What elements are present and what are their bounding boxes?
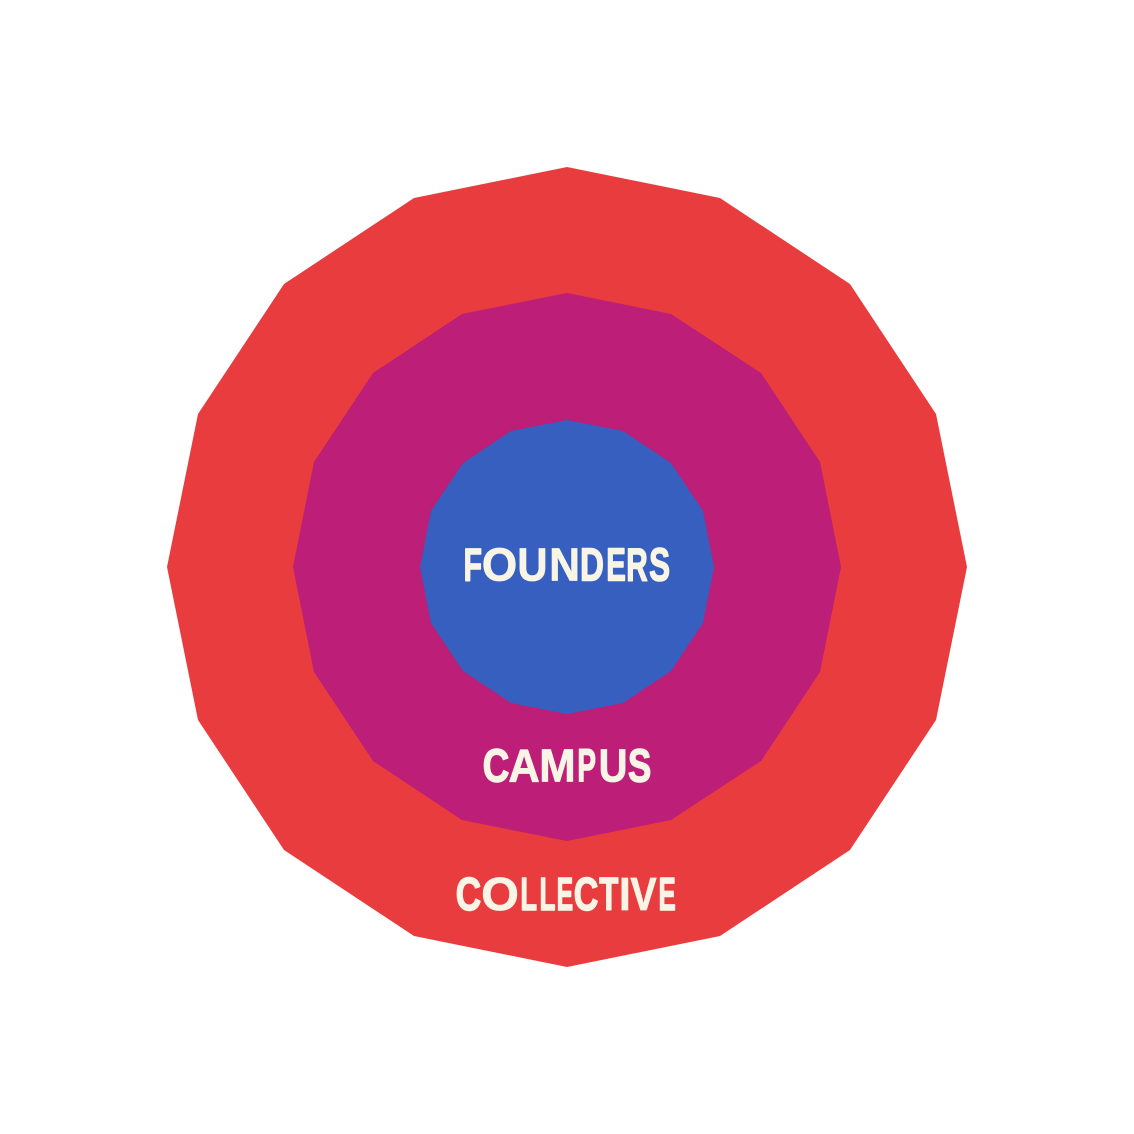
middle ring: campus <box>293 293 841 841</box>
label: campus: S <box>628 740 651 792</box>
label: founders: N <box>549 540 580 591</box>
label: campus: P <box>577 742 596 792</box>
label: founders: R <box>626 540 648 591</box>
label: founders: S <box>649 540 670 591</box>
label: founders: F <box>464 540 482 591</box>
label: collective: V <box>630 869 657 921</box>
inner circle: founders <box>420 420 714 714</box>
label: founders: E <box>606 540 626 591</box>
label: collective: E <box>557 869 573 920</box>
label: collective: O <box>481 868 519 920</box>
label: campus: M <box>539 740 576 792</box>
label: founders: D <box>580 540 604 591</box>
label: founders: U <box>517 540 548 591</box>
label: collective <box>456 868 676 921</box>
label: campus: A <box>508 740 540 792</box>
label: founders <box>464 539 670 591</box>
label: collective: C <box>456 868 481 920</box>
label: collective: L <box>520 870 537 921</box>
label: collective: T <box>599 869 618 921</box>
outer ring: collective <box>167 167 967 967</box>
label: collective: C <box>574 868 598 920</box>
label: collective: L <box>540 868 556 920</box>
label: campus: U <box>599 741 628 792</box>
label: campus: C <box>483 740 509 792</box>
label: collective: I <box>619 869 631 921</box>
label: founders: O <box>482 539 517 591</box>
label: collective: E <box>658 868 676 920</box>
label: campus <box>483 740 651 792</box>
